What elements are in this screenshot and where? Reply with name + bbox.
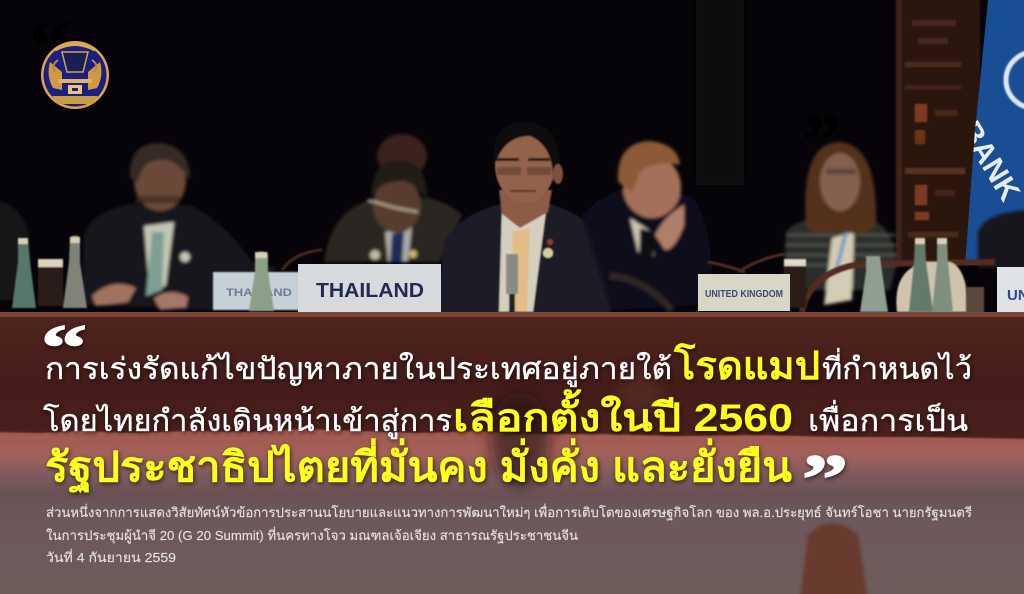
flag: World Bank: BANK	[953, 116, 1024, 207]
carved wood panel	[896, 0, 980, 262]
seal: Secretariat of the Cabinet	[41, 41, 109, 109]
person: left delegate	[82, 143, 278, 310]
line 1: การเร่งรัดแก้ไขปัญหาภายในประเทศอยู่ภายใต้	[45, 351, 672, 387]
name plate: right edge	[997, 267, 1024, 313]
line 1	[45, 343, 972, 388]
person: far left edge	[0, 200, 30, 300]
name plate: Thailand rear	[213, 272, 299, 310]
caption line 1: ส่วนหนึ่งจากการแสดงวิสัยทัศน์หัวข้อการประสานนโยบายและแนวทางการพัฒนาใหม่ๆ เพื่อการเติบโตของเศรษฐกิจโลก ของ พล.อ.ประยุทธ์ จันทร์โอชา นายกรัฐมนตรี	[46, 504, 972, 521]
chairs	[282, 250, 995, 312]
quote mark: closing white: ”	[802, 441, 848, 517]
flag: World Bank	[965, 0, 1024, 265]
line 2	[43, 389, 968, 440]
name plate: Thailand: THAILAND	[316, 280, 424, 302]
reflection: bottle on table	[800, 524, 868, 594]
caption line 2: ในการประชุมผู้นำจี 20 (G 20 Summit) ที่นครหางโจว มณฑลเจ้อเจียง สาธารณรัฐประชาชนจีน	[46, 527, 578, 544]
reflections	[0, 368, 1024, 502]
quotation	[41, 312, 972, 517]
source caption	[46, 504, 972, 565]
person: far right delegate	[978, 210, 1024, 268]
person: woman in striped jacket	[784, 142, 897, 305]
quote mark: top left black: “	[30, 8, 70, 84]
person: rear delegate behind	[324, 134, 462, 262]
name plate: United Kingdom	[698, 274, 790, 311]
bottle in front of plate	[249, 252, 274, 311]
table wood panel	[0, 317, 1024, 452]
photo: summit meeting scene	[0, 0, 1024, 320]
line 1: ที่กำหนดไว้	[822, 348, 972, 386]
line 2: โดยไทยกำลังเดินหน้าเข้าสู่การ	[43, 403, 452, 439]
table lower reflection	[0, 429, 1024, 594]
name plate: Thailand rear: THAILAND	[226, 287, 292, 299]
name plate: Thailand	[298, 264, 441, 312]
line 1: โรดแมป	[673, 343, 820, 388]
dark pillar backdrop	[696, 0, 744, 185]
caption line 3: date: วันที่ 4 กันยายน 2559	[46, 549, 176, 565]
line 2: เลือกตั้งในปี 2560	[453, 389, 793, 440]
person: British delegate	[582, 141, 712, 311]
quote mark: opening white: “	[41, 312, 87, 384]
line 2: เพื่อการเป็น	[808, 400, 968, 438]
line 3: รัฐประชาธิปไตยที่มั่นคง มั่งคั่ง และยั่งยืน	[45, 438, 792, 494]
person: prime minister centre	[438, 122, 611, 312]
glasses and bottles	[12, 236, 984, 313]
table top edge	[0, 312, 1024, 320]
name plate: United Kingdom: UNITED KINGDOM	[705, 289, 783, 300]
quote mark: upper right black: ”	[803, 99, 841, 183]
